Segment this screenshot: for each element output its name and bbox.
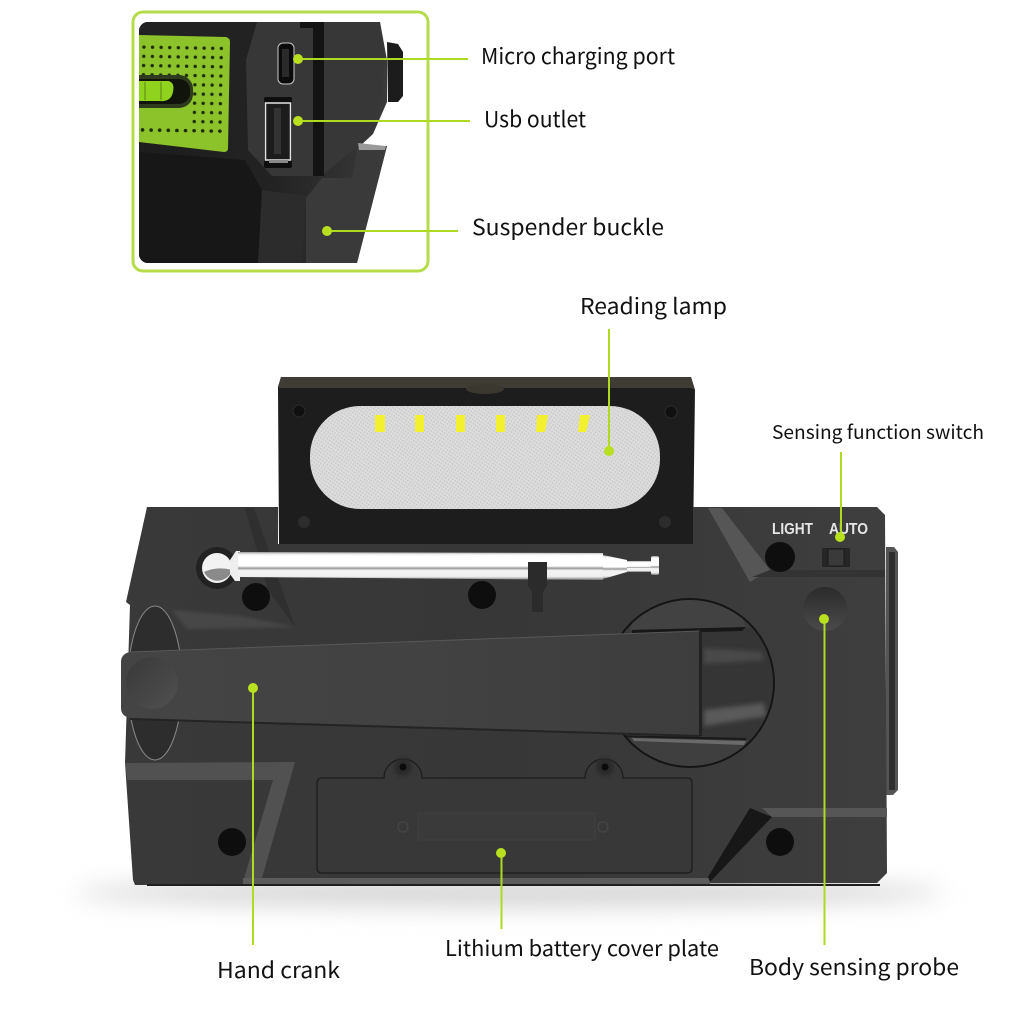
label: usb outlet: Usb outlet <box>484 102 586 134</box>
component: battery cover plate <box>317 758 692 873</box>
leader: body sensing probe <box>819 614 829 945</box>
component: mode labels: LIGHT <box>772 521 813 538</box>
usb port <box>264 97 292 168</box>
antenna clip <box>528 562 547 612</box>
component: hand crank arm <box>121 631 702 737</box>
label: suspender buckle: Suspender buckle <box>472 210 664 242</box>
knob <box>387 42 403 102</box>
shadow under device <box>75 879 945 907</box>
leader: lithium battery cover plate <box>496 848 506 929</box>
leader: hand crank <box>248 683 258 945</box>
inset frame <box>133 12 428 271</box>
component: ports and holes <box>218 542 795 856</box>
label: lithium battery cover plate: Lithium battery cover plate <box>445 932 719 963</box>
body shell <box>125 507 887 885</box>
lower-right wedge <box>708 808 772 882</box>
device: main body <box>125 377 898 886</box>
component: left crank wheel <box>128 606 182 760</box>
slider switch <box>139 75 193 108</box>
component: mode labels: AUTO <box>829 521 868 538</box>
leader: usb outlet <box>293 116 470 126</box>
component: body sensing probe window <box>803 587 847 631</box>
component: sensing switch <box>822 548 850 567</box>
micro usb port <box>278 43 294 84</box>
label: sensing function switch: Sensing function switch <box>772 418 984 445</box>
green speaker panel <box>139 35 230 152</box>
label: body sensing probe: Body sensing probe <box>749 950 959 982</box>
top-right facet <box>708 508 770 582</box>
lamp panel <box>278 377 695 544</box>
component: mode labels <box>772 521 868 538</box>
bottom edge strip <box>243 878 710 884</box>
leader: sensing function switch <box>835 452 845 542</box>
lower-left corner <box>125 762 295 882</box>
inset device photo <box>125 22 403 263</box>
top-left facet <box>245 508 295 627</box>
label: hand crank: Hand crank <box>217 953 340 985</box>
LED row <box>375 415 590 432</box>
right side strip <box>886 547 898 795</box>
leader: reading lamp <box>604 329 614 456</box>
leader: suspender buckle <box>322 226 458 236</box>
label: reading lamp: Reading lamp <box>580 289 727 321</box>
component: crank wheel <box>621 598 775 768</box>
lamp diffuser <box>310 406 660 509</box>
label: micro charging port: Micro charging port <box>481 39 675 71</box>
component: antenna <box>196 547 659 612</box>
panel: detail inset <box>125 12 428 271</box>
leader: micro charging port <box>293 54 468 64</box>
